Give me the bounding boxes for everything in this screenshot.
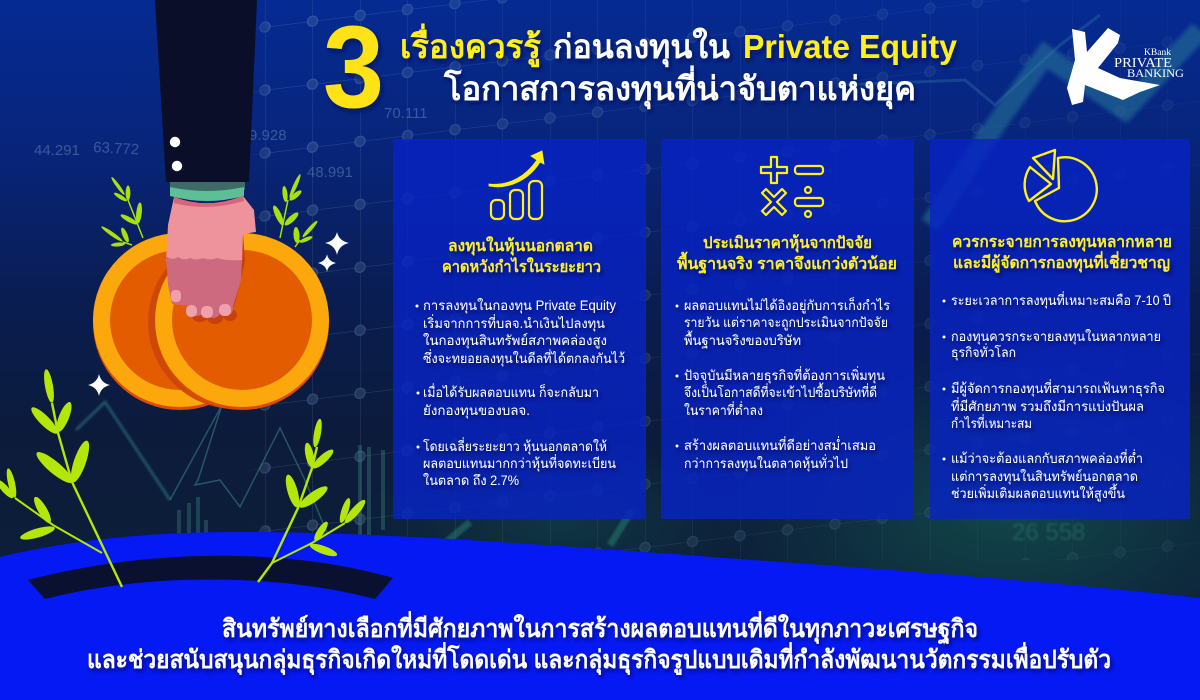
bullets: card 3: กองทุนควรกระจายลงทุนในหลากหลาย xyxy=(951,328,1161,345)
panel: card 3 xyxy=(930,139,1190,519)
plant: right sprig xyxy=(258,418,368,582)
bullets: card 1: โดยเฉลี่ยระยะยาว หุ้นนอกตลาดให้ xyxy=(423,437,607,455)
heading: card 1: คาดหวังกำไรในระยะยาว xyxy=(442,257,601,276)
panel: card 2 xyxy=(661,139,914,519)
bullets: card 2: สร้างผลตอบแทนที่ดีอย่างสม่ำเสมอ xyxy=(684,436,876,453)
icon: pie chart xyxy=(1025,150,1097,221)
icon: sparkles xyxy=(88,232,349,396)
title: Private Equity xyxy=(743,28,958,65)
icon: math symbols xyxy=(761,157,823,217)
bullets: card 2: ปัจจุบันมีหลายธุรกิจที่ต้องการเพิ่มทุน xyxy=(684,366,885,384)
bullets: card 1 xyxy=(416,297,625,488)
bullets: card 3: แต่การลงทุนในสินทรัพย์นอกตลาด xyxy=(951,468,1138,485)
heading: card 2 xyxy=(677,234,897,274)
heading: card 2: ประเมินราคาหุ้นจากปัจจัย xyxy=(703,234,872,253)
bullets: card 1: เมื่อได้รับผลตอบแทน ก็จะกลับมา xyxy=(423,383,599,400)
illustration: hand holding two gold coins xyxy=(93,0,329,410)
bullets: card 3 xyxy=(942,291,1171,502)
footer message xyxy=(87,611,1111,676)
background: 70.111 xyxy=(384,105,428,122)
heading: card 1: ลงทุนในหุ้นนอกตลาด xyxy=(448,236,593,256)
bullets: card 3: มีผู้จัดการกองทุนที่สามารถเฟ้นหาธุรกิจ xyxy=(951,379,1165,397)
title: โอกาสการลงทุนที่น่าจับตาแห่งยุค xyxy=(443,65,916,110)
background: 26 558 xyxy=(1012,519,1085,546)
ground: blue hill xyxy=(0,532,1200,700)
background: 63.772 xyxy=(93,139,140,158)
heading: card 2: พื้นฐานจริง ราคาจึงแกว่งตัวน้อย xyxy=(677,251,897,274)
logo: KBank Private Banking xyxy=(1067,28,1184,105)
bullets: card 3: ช่วยเพิ่มเติมผลตอบแทนให้สูงขึ้น xyxy=(951,483,1125,502)
title xyxy=(400,23,958,110)
bullets: card 1: ซึ่งจะทยอยลงทุนในดีลที่ได้ตกลงกันไว้ xyxy=(423,349,625,367)
bullets: card 2: รายวัน แต่ราคาจะถูกประเมินจากปัจจัย xyxy=(684,315,888,331)
bullets: card 1: ในกองทุนสินทรัพย์สภาพคล่องสูง xyxy=(423,332,607,349)
bullets: card 3: กำไรที่เหมาะสม xyxy=(951,414,1032,431)
bullets: card 3: ระยะเวลาการลงทุนที่เหมาะสมคือ 7-10 ปี xyxy=(951,291,1171,309)
bullets: card 1: เริ่มจากการที่บลจ.นำเงินไปลงทุน xyxy=(423,314,605,332)
bullets: card 2 xyxy=(676,296,890,472)
icon: growth chart with arrow xyxy=(489,151,544,219)
left coin xyxy=(93,233,267,410)
bullets: card 1: ในตลาด ถึง 2.7% xyxy=(423,472,519,488)
heading: card 3: ควรกระจายการลงทุนหลากหลาย xyxy=(952,234,1172,252)
plant: small sprigs behind coins xyxy=(100,173,319,247)
footer message: สินทรัพย์ทางเลือกที่มีศักยภาพในการสร้างผลตอบแทนที่ดีในทุกภาวะเศรษฐกิจ xyxy=(222,611,978,645)
bullets: card 2: ผลตอบแทนไม่ได้อิงอยู่กับการเก็งกำไร xyxy=(684,296,890,314)
right coin xyxy=(148,233,329,410)
bullets: card 2: จึงเป็นโอกาสดีที่จะเข้าไปซื้อบริษัทที่ดี xyxy=(684,382,877,400)
title: ก่อนลงทุนใน xyxy=(553,27,730,68)
bullets: card 3: ธุรกิจทั่วโลก xyxy=(951,343,1016,361)
title: number 3: 3 xyxy=(323,1,384,132)
plant: left sprig xyxy=(0,369,122,587)
bullets: card 3: ที่มีศักยภาพ รวมถึงมีการแบ่งปันผล xyxy=(951,397,1144,414)
sleeve xyxy=(155,0,257,182)
bullets: card 3: แม้ว่าจะต้องแลกกับสภาพคล่องที่ต่ำ xyxy=(951,449,1143,466)
bullets: card 1: ผลตอบแทนมากกว่าหุ้นที่จดทะเบียน xyxy=(423,454,616,472)
panel: card 1 xyxy=(393,139,646,519)
footer message: และช่วยสนับสนุนกลุ่มธุรกิจเกิดใหม่ที่โดดเด่น และกลุ่มธุรกิจรูปแบบเดิมที่กำลังพัฒนานวัตกรรมเพื่อปรับตัว xyxy=(87,642,1111,676)
bullets: card 1: ยังกองทุนของบลจ. xyxy=(423,403,530,419)
heading: card 1 xyxy=(442,236,601,276)
logo: KBank Private Banking: PRIVATE xyxy=(1114,56,1172,71)
background: 48.991 xyxy=(307,164,353,181)
hand xyxy=(166,196,256,324)
bullets: card 2: พื้นฐานจริงของบริษัท xyxy=(684,330,801,349)
heading: card 3: และมีผู้จัดการกองทุนที่เชี่ยวชาญ xyxy=(953,251,1170,274)
background: 44.291 xyxy=(34,142,80,159)
bullets: card 2: ในราคาที่ต่ำลง xyxy=(684,401,763,418)
bullets: card 2: กว่าการลงทุนในตลาดหุ้นทั่วไป xyxy=(684,454,848,472)
background: 9.928 xyxy=(249,127,287,144)
sleeve buttons xyxy=(170,137,182,171)
logo: KBank Private Banking: KBank xyxy=(1144,47,1172,57)
title: เรื่องควรรู้ xyxy=(400,23,541,68)
bullets: card 1: การลงทุนในกองทุน Private Equity xyxy=(423,297,616,314)
planting hole xyxy=(28,556,393,599)
cuff xyxy=(170,182,245,201)
heading: card 3 xyxy=(952,234,1172,274)
logo: KBank Private Banking: BANKING xyxy=(1127,66,1184,80)
